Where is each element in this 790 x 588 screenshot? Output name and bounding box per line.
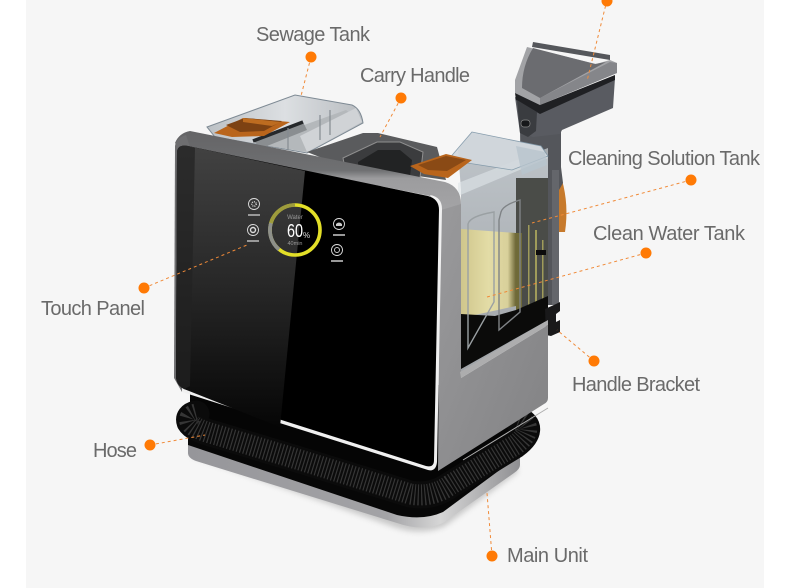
icon: wash mode left top: [248, 198, 260, 216]
handle bracket: [545, 302, 560, 336]
nozzle lower body: [515, 78, 615, 137]
icon: wash mode right top: [333, 218, 345, 236]
callout: cleaning solution tank: [532, 148, 761, 223]
callout: handle bracket: [557, 330, 700, 396]
water gauge ring: Water: [287, 215, 303, 221]
callout: hose: Hose: [93, 440, 137, 462]
callout: clean water tank: Clean Water Tank: [593, 223, 746, 245]
nozzle neck: [517, 100, 537, 137]
callout: main unit: [486, 493, 588, 567]
callout: clean water tank: [487, 223, 746, 297]
callout: nozzle: [587, 0, 612, 81]
sewage tank: [207, 95, 363, 153]
nozzle face rim: [515, 47, 617, 105]
nozzle face: [522, 48, 606, 98]
base plate: [188, 420, 520, 532]
water gauge ring: [270, 205, 320, 255]
callout: main unit: Main Unit: [507, 545, 588, 567]
callout: sewage tank: Sewage Tank: [256, 24, 371, 46]
nozzle dark band: [515, 75, 615, 114]
touch panel screen: [176, 146, 439, 466]
water gauge ring: %: [303, 231, 310, 240]
callout: hose: [93, 435, 205, 462]
hose: [190, 385, 527, 495]
front frame: [174, 131, 461, 470]
orange cap: [410, 154, 472, 178]
clean water and cleaning solution tanks: [410, 132, 548, 372]
product: main unit illustration: [174, 42, 617, 532]
callout: cleaning solution tank: Cleaning Solution Tank: [568, 148, 761, 170]
callout: sewage tank: [256, 24, 371, 96]
callout: touch panel: Touch Panel: [41, 298, 145, 320]
handle and nozzle: [515, 42, 617, 305]
callout: handle bracket: Handle Bracket: [572, 374, 700, 396]
callout: touch panel: [41, 245, 247, 320]
icon: wash mode right bottom: [331, 244, 343, 262]
orange cap: [214, 118, 290, 137]
water gauge ring: 60: [287, 221, 303, 241]
side housing: [438, 190, 548, 471]
water gauge ring: 40min: [288, 241, 302, 247]
nozzle top lip: [532, 42, 610, 60]
carry handle: [307, 133, 446, 180]
callout: carry handle: Carry Handle: [360, 65, 470, 87]
icon: wash mode left bottom: [247, 224, 259, 242]
callout: carry handle: [360, 65, 470, 137]
